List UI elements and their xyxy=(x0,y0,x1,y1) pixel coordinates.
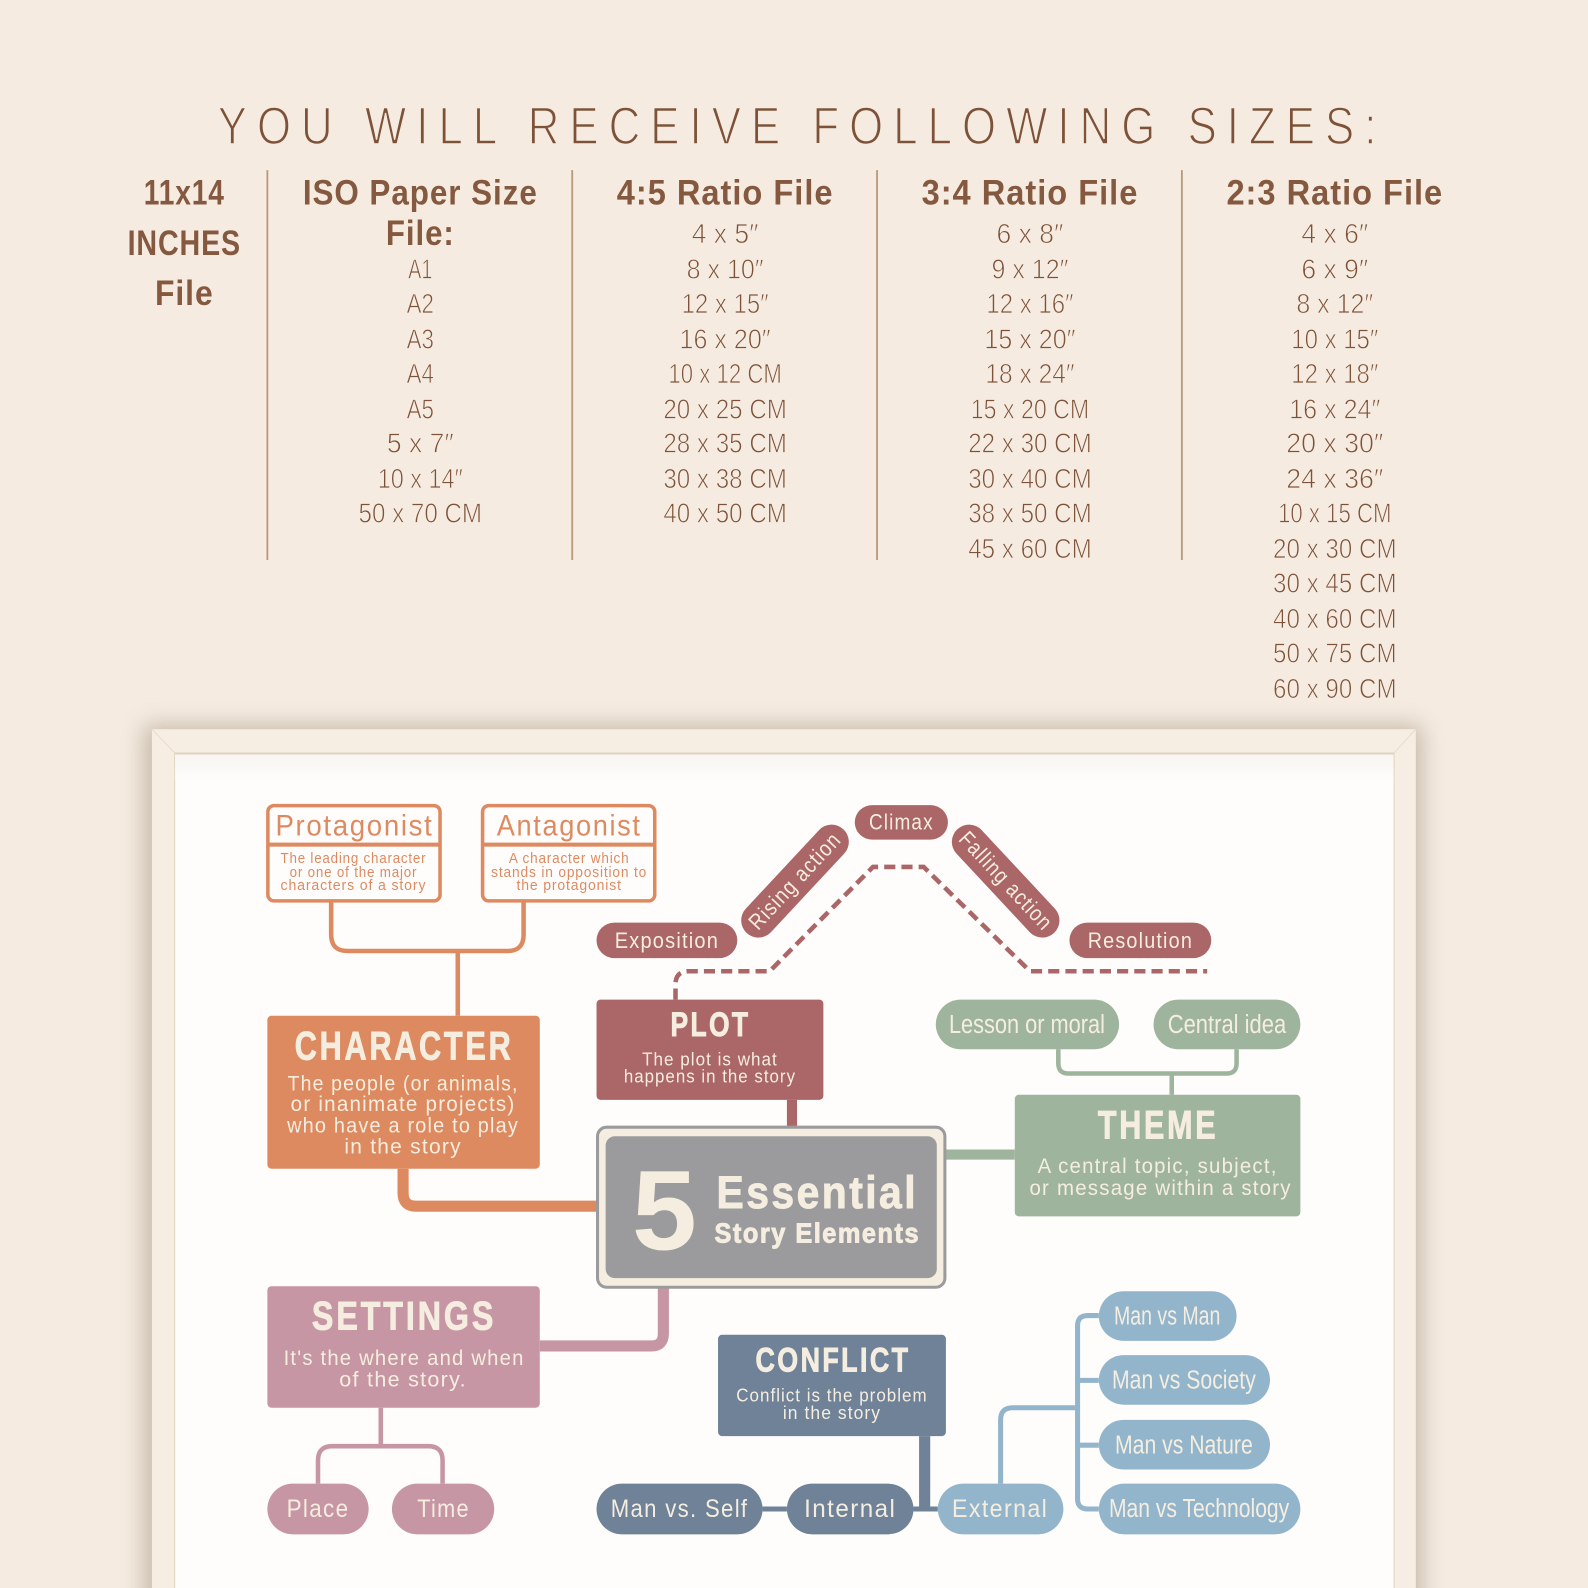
pill: man vs technology xyxy=(1099,1484,1300,1534)
column: ISO paper size: File: xyxy=(386,213,455,253)
column: 4:5 ratio xyxy=(617,173,833,529)
panel: plot group xyxy=(597,805,1211,1128)
column: 4:5 ratio: 30 x 38 CM xyxy=(663,463,787,494)
column: ISO paper size: A4 xyxy=(407,358,434,389)
box: conflict: CONFLICT xyxy=(756,1341,910,1379)
column: 3:4 ratio: 9 x 12″ xyxy=(991,254,1069,285)
column: 3:4 ratio xyxy=(922,173,1138,564)
box: protagonist xyxy=(267,806,441,901)
column: 2:3 ratio xyxy=(1226,173,1443,704)
box: antagonist xyxy=(482,806,655,901)
pill: man vs society xyxy=(1099,1355,1270,1405)
box: plot: happens in the story xyxy=(624,1067,796,1087)
pill: resolution xyxy=(1069,923,1211,958)
box: protagonist: Protagonist xyxy=(275,810,433,843)
column: 2:3 ratio: 20 x 30″ xyxy=(1286,428,1384,459)
column: 3:4 ratio: 3:4 Ratio File xyxy=(922,173,1138,213)
column: 2:3 ratio: 60 x 90 CM xyxy=(1273,673,1397,704)
pill: man vs nature xyxy=(1099,1420,1270,1470)
pill: time: Time xyxy=(417,1495,470,1523)
box: plot xyxy=(597,1000,823,1100)
box: theme: THEME xyxy=(1098,1103,1218,1147)
box: plot: PLOT xyxy=(670,1006,750,1044)
column dividers xyxy=(267,170,1182,560)
box: theme: or message within a story xyxy=(1029,1176,1292,1200)
column: 11x14 inches xyxy=(128,173,241,313)
pill: exposition: Exposition xyxy=(615,928,719,953)
pill: internal: Internal xyxy=(804,1495,896,1523)
column: 2:3 ratio: 2:3 Ratio File xyxy=(1226,173,1443,213)
central title block: 5 xyxy=(632,1148,697,1275)
poster frame xyxy=(144,725,1422,1588)
column: ISO paper size xyxy=(303,173,538,529)
box: settings xyxy=(267,1286,540,1408)
central title block: Essential xyxy=(717,1167,918,1218)
column: 4:5 ratio: 4 x 5″ xyxy=(692,218,759,249)
pill: lesson or moral: Lesson or moral xyxy=(949,1009,1105,1039)
box: theme: A central topic, subject, xyxy=(1038,1154,1278,1178)
column: ISO paper size: 5 x 7″ xyxy=(387,428,454,459)
pill: place xyxy=(267,1484,369,1534)
column: 2:3 ratio: 10 x 15 CM xyxy=(1278,498,1392,529)
column: 2:3 ratio: 12 x 18″ xyxy=(1291,358,1379,389)
column: 3:4 ratio: 15 x 20 CM xyxy=(971,393,1089,424)
column: 2:3 ratio: 40 x 60 CM xyxy=(1273,603,1397,634)
column: 4:5 ratio: 4:5 Ratio File xyxy=(617,173,833,213)
pill: climax: Climax xyxy=(869,809,934,834)
box: protagonist: The leading character xyxy=(281,851,426,867)
column: 2:3 ratio: 20 x 30 CM xyxy=(1273,533,1397,564)
pill: climax xyxy=(855,805,948,840)
title: YOU WILL RECEIVE FOLLOWING SIZES: xyxy=(218,97,1386,156)
box: character: or inanimate projects) xyxy=(291,1092,515,1116)
central title block: Story Elements xyxy=(714,1218,920,1249)
column: ISO paper size: 10 x 14″ xyxy=(378,463,463,494)
pill: man vs society: Man vs Society xyxy=(1112,1364,1256,1394)
box: plot: The plot is what xyxy=(642,1049,778,1069)
pill: internal xyxy=(787,1484,914,1534)
column: ISO paper size: A2 xyxy=(407,288,434,319)
panel: settings group xyxy=(267,1286,663,1534)
column: 4:5 ratio: 28 x 35 CM xyxy=(663,428,787,459)
column: 2:3 ratio: 16 x 24″ xyxy=(1289,393,1381,424)
settings connectors xyxy=(318,1287,663,1484)
connectors: character xyxy=(331,901,598,1206)
column: 2:3 ratio: 6 x 9″ xyxy=(1301,254,1369,285)
pill: man vs man xyxy=(1099,1291,1237,1341)
column: 2:3 ratio: 4 x 6″ xyxy=(1301,218,1369,249)
pill: lesson or moral xyxy=(936,1000,1119,1049)
box: conflict: Conflict is the problem xyxy=(736,1386,928,1406)
pill: man vs nature: Man vs Nature xyxy=(1115,1429,1253,1459)
plot arc dashed line xyxy=(676,867,1207,1000)
box: settings: of the story. xyxy=(339,1367,467,1391)
box: conflict xyxy=(718,1335,946,1436)
column: 2:3 ratio: 30 x 45 CM xyxy=(1273,567,1397,598)
pill: exposition xyxy=(597,923,737,958)
pill: external xyxy=(938,1484,1063,1534)
column: ISO paper size: 50 x 70 CM xyxy=(359,498,482,529)
box: character: who have a role to play xyxy=(286,1113,519,1137)
plot connector xyxy=(787,1100,797,1128)
box: settings: SETTINGS xyxy=(312,1295,496,1339)
column: 4:5 ratio: 10 x 12 CM xyxy=(668,358,782,389)
column: 2:3 ratio: 50 x 75 CM xyxy=(1273,637,1397,668)
pill: central idea: Central idea xyxy=(1168,1009,1286,1039)
column: 4:5 ratio: 12 x 15″ xyxy=(682,288,769,319)
column: 11x14 inches: 11x14 xyxy=(144,173,225,213)
column: 2:3 ratio: 10 x 15″ xyxy=(1291,323,1379,354)
box: character: CHARACTER xyxy=(295,1024,513,1068)
pill: external: External xyxy=(952,1495,1048,1523)
column: 4:5 ratio: 20 x 25 CM xyxy=(663,393,787,424)
box: conflict: in the story xyxy=(783,1403,881,1423)
box: character xyxy=(267,1016,540,1169)
column: ISO paper size: A3 xyxy=(407,323,434,354)
pill: man vs self: Man vs. Self xyxy=(611,1495,748,1523)
pill: rising action: Rising action xyxy=(743,827,846,935)
box: settings: It's the where and when xyxy=(284,1346,525,1370)
pill: time xyxy=(392,1484,494,1534)
box: protagonist: characters of a story xyxy=(281,878,426,894)
conflict connectors xyxy=(763,1316,1099,1509)
pill: resolution: Resolution xyxy=(1088,928,1193,953)
pill: man vs technology: Man vs Technology xyxy=(1109,1493,1290,1523)
box: protagonist: or one of the major xyxy=(290,865,417,881)
box: antagonist: A character which xyxy=(509,851,629,867)
column: 4:5 ratio: 40 x 50 CM xyxy=(663,498,787,529)
central title block xyxy=(598,1127,945,1287)
column: 11x14 inches: File xyxy=(155,273,214,313)
box: character: The people (or animals, xyxy=(288,1072,519,1096)
column: 4:5 ratio: 8 x 10″ xyxy=(687,254,764,285)
pill: man vs man: Man vs Man xyxy=(1114,1301,1220,1331)
box: antagonist: stands in opposition to xyxy=(491,865,647,881)
column: 3:4 ratio: 6 x 8″ xyxy=(997,218,1064,249)
panel: conflict group xyxy=(597,1291,1300,1534)
panel: character group xyxy=(267,806,655,1206)
panel: theme group xyxy=(936,1000,1300,1216)
column: ISO paper size: A1 xyxy=(408,254,432,285)
column: 3:4 ratio: 45 x 60 CM xyxy=(968,533,1092,564)
box: antagonist: Antagonist xyxy=(497,810,642,843)
box: character: in the story xyxy=(344,1135,462,1159)
theme connectors xyxy=(945,1049,1237,1155)
column: 11x14 inches: INCHES xyxy=(128,223,241,263)
pill: place: Place xyxy=(287,1495,349,1523)
column: 2:3 ratio: 24 x 36″ xyxy=(1286,463,1384,494)
box: antagonist: the protagonist xyxy=(517,878,622,894)
column: 2:3 ratio: 8 x 12″ xyxy=(1296,288,1374,319)
column: 3:4 ratio: 30 x 40 CM xyxy=(968,463,1092,494)
column: 3:4 ratio: 22 x 30 CM xyxy=(968,428,1092,459)
column: 3:4 ratio: 38 x 50 CM xyxy=(968,498,1092,529)
column: 4:5 ratio: 16 x 20″ xyxy=(680,323,771,354)
column: 3:4 ratio: 12 x 16″ xyxy=(986,288,1074,319)
column: 3:4 ratio: 18 x 24″ xyxy=(985,358,1075,389)
column: ISO paper size: A5 xyxy=(407,393,434,424)
pill: central idea xyxy=(1154,1000,1300,1049)
column: ISO paper size: ISO Paper Size xyxy=(303,173,538,213)
column: 3:4 ratio: 15 x 20″ xyxy=(984,323,1076,354)
box: theme xyxy=(1015,1095,1300,1216)
pill: man vs self xyxy=(597,1484,763,1534)
pill: falling action: Falling action xyxy=(954,826,1058,935)
